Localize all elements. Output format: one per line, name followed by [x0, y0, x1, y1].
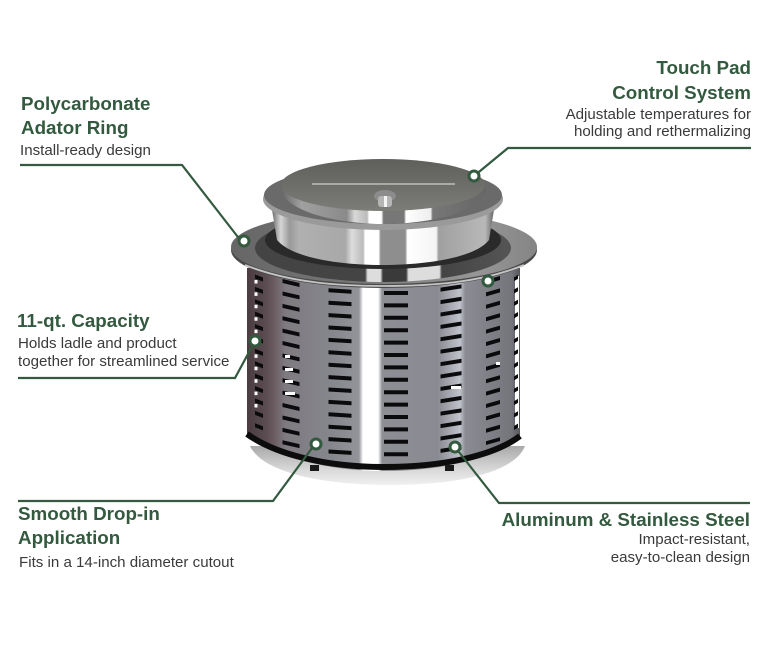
callout: 11-qt. Capacity	[17, 310, 260, 378]
dot	[450, 442, 460, 452]
white light showing through slots	[285, 355, 500, 395]
heading: 11-qt. Capacity	[17, 310, 150, 331]
heading: Smooth Drop-in	[18, 503, 160, 524]
description line 2: together for streamlined service	[18, 353, 229, 370]
leader line	[20, 165, 241, 241]
leader line	[455, 447, 750, 503]
callout: Polycarbonate Adator Ring	[20, 93, 249, 246]
callout: Aluminum and Stainless Steel	[450, 442, 750, 566]
see-through right edge	[515, 276, 519, 428]
heading line 2: Adator Ring	[21, 117, 128, 138]
callout: Smooth Drop-in Application	[18, 439, 321, 571]
leader line	[18, 444, 315, 501]
dot	[250, 336, 260, 346]
dot	[311, 439, 321, 449]
description: Fits in a 14-inch diameter cutout	[19, 554, 235, 571]
description: Holds ladle and product	[18, 335, 177, 352]
dark inner ring	[255, 214, 511, 282]
see-through left slots	[254, 280, 258, 415]
outer flange	[231, 212, 537, 288]
heading: Touch Pad	[656, 57, 751, 78]
heading: Polycarbonate	[21, 93, 150, 114]
feet	[310, 465, 454, 471]
heading line 2: Application	[18, 527, 120, 548]
description: Install-ready design	[20, 142, 151, 159]
description: Impact-resistant,	[638, 531, 750, 548]
product illustration: drop-in warmer	[231, 159, 537, 485]
marker dot on body	[483, 276, 493, 286]
heading line 2: Control System	[612, 82, 751, 103]
leader line	[474, 148, 751, 176]
callout: Touch Pad Control System	[469, 57, 751, 181]
lid slot	[312, 183, 455, 185]
floor shadow	[250, 446, 525, 485]
dot	[469, 171, 479, 181]
leader line	[18, 341, 255, 378]
base band	[247, 434, 520, 467]
lid disc	[281, 159, 485, 211]
vent slots	[259, 276, 516, 457]
description: Adjustable temperatures for	[566, 106, 751, 123]
description line 2: easy-to-clean design	[611, 549, 750, 566]
lid knob	[374, 190, 396, 207]
bowl	[272, 210, 494, 265]
lid collar	[281, 188, 486, 224]
description line 2: holding and rethermalizing	[574, 123, 751, 140]
cylinder body	[247, 268, 520, 471]
lid outer ring	[263, 168, 503, 230]
flange front rim	[245, 265, 524, 286]
dot	[239, 236, 249, 246]
heading: Aluminum & Stainless Steel	[502, 509, 750, 530]
